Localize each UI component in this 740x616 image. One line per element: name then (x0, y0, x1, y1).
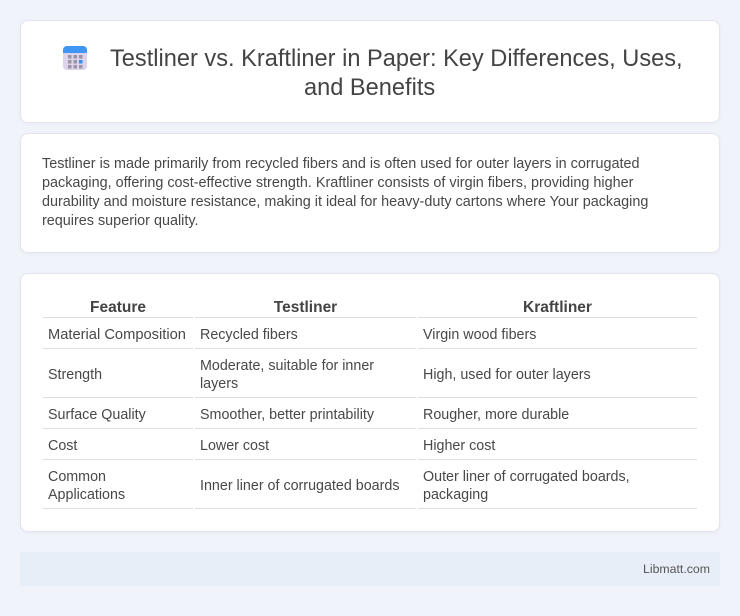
table header: Kraftliner: Kraftliner (523, 299, 592, 316)
row: cost: Cost (48, 438, 77, 454)
footer: Libmatt.com: Libmatt.com (643, 562, 710, 576)
text: Virgin wood fibers (423, 327, 536, 343)
text: description (42, 156, 648, 229)
text: description: Testliner is made primarily from recycled fibers and is often used for outer layers in corrugated (42, 156, 639, 172)
row: common applications (48, 469, 125, 503)
text: description: requires superior quality. (42, 213, 199, 229)
text: Recycled fibers (200, 327, 298, 343)
row: strength: Strength (48, 367, 102, 383)
text: Higher cost (423, 438, 495, 454)
row: common applications: Applications (48, 487, 125, 503)
table header: Feature: Feature (90, 299, 146, 316)
row: surface quality: Surface Quality (48, 407, 146, 423)
text: Smoother, better printability (200, 407, 374, 423)
row: common applications: Common (48, 469, 106, 485)
footer bar (20, 552, 720, 586)
title: and Benefits (304, 75, 435, 101)
panel: title (20, 20, 720, 123)
row: material composition: Material Composition (48, 327, 186, 343)
panel: description (20, 133, 720, 253)
title (110, 46, 683, 101)
text: layers (200, 376, 238, 392)
text: Rougher, more durable (423, 407, 569, 423)
text: High, used for outer layers (423, 367, 591, 383)
text: Moderate, suitable for inner (200, 358, 374, 374)
text: description: durability and moisture resistance, making it ideal for heavy-duty cartons where Your packaging (42, 194, 648, 210)
text: packaging (423, 487, 488, 503)
panel: comparison table (20, 273, 720, 532)
title: Testliner vs. Kraftliner in Paper: Key Differences, Uses, (110, 46, 683, 72)
table header: Testliner: Testliner (274, 299, 337, 316)
text: Lower cost (200, 438, 269, 454)
text: Inner liner of corrugated boards (200, 478, 399, 494)
text: description: packaging, offering cost-effective strength. Kraftliner consists of virgin fibers, providing higher (42, 175, 633, 191)
text: Outer liner of corrugated boards, (423, 469, 630, 485)
icon: calendar (63, 46, 87, 70)
